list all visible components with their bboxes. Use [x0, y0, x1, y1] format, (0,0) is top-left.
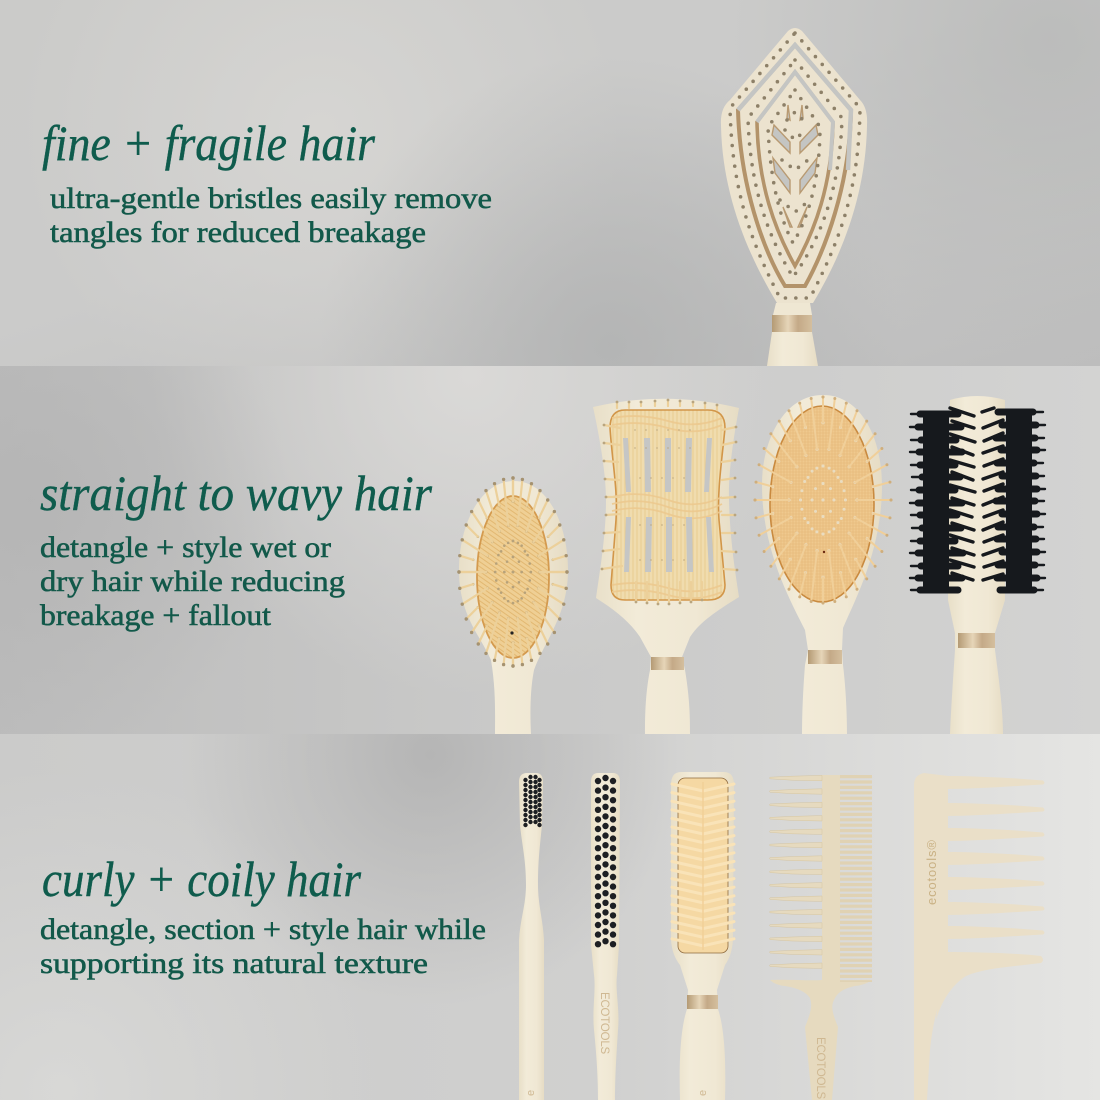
icon: styling brush with gold pins: [671, 772, 734, 1100]
icon: double-sided comb: [770, 775, 872, 1100]
icon: shield-shaped vented brush: [721, 28, 867, 366]
icon: slim toothbrush-style edge brush: e: [525, 1090, 537, 1096]
icon: slim toothbrush-style edge brush: [519, 773, 544, 1100]
text block: curly hair description: [40, 914, 486, 980]
panel: straight to wavy hair: [0, 366, 1100, 734]
icon: double-sided comb: ECOTOOLS: [814, 1037, 826, 1100]
icon: vented paddle brush: [593, 399, 739, 734]
panel: fine + fragile hair: [0, 0, 1100, 366]
icon: large oval pin brush: [755, 395, 891, 734]
icon: wide-tooth rake comb with tail: ecotools®: [924, 840, 939, 905]
icon: narrow boar teasing brush: ECOTOOLS: [598, 992, 610, 1055]
text block: curly hair description: supporting its natural texture: [40, 948, 428, 980]
text block: straight hair description: detangle + style wet or: [40, 532, 331, 564]
heading: straight to wavy hair: straight to wavy hair: [40, 465, 432, 521]
icon: styling brush with gold pins: e: [697, 1090, 709, 1096]
text block: straight hair description: [40, 532, 345, 632]
icon: narrow boar teasing brush: [591, 773, 620, 1100]
icon: small oval pin brush: [459, 478, 568, 734]
text block: fine hair description: [50, 183, 492, 249]
text block: fine hair description: tangles for reduced breakage: [50, 217, 426, 249]
heading: curly + coily hair: curly + coily hair: [42, 851, 361, 907]
text block: curly hair description: detangle, section + style hair while: [40, 914, 486, 946]
text block: straight hair description: dry hair while reducing: [40, 566, 345, 598]
text block: straight hair description: breakage + fallout: [40, 600, 272, 632]
panel: curly + coily hair: [0, 734, 1100, 1100]
text block: fine hair description: ultra-gentle bristles easily remove: [50, 183, 492, 215]
icon: wide-tooth rake comb with tail: [914, 773, 1044, 1100]
icon: round boar bristle brush: [910, 396, 1045, 734]
heading: fine + fragile hair: fine + fragile hair: [42, 115, 375, 171]
